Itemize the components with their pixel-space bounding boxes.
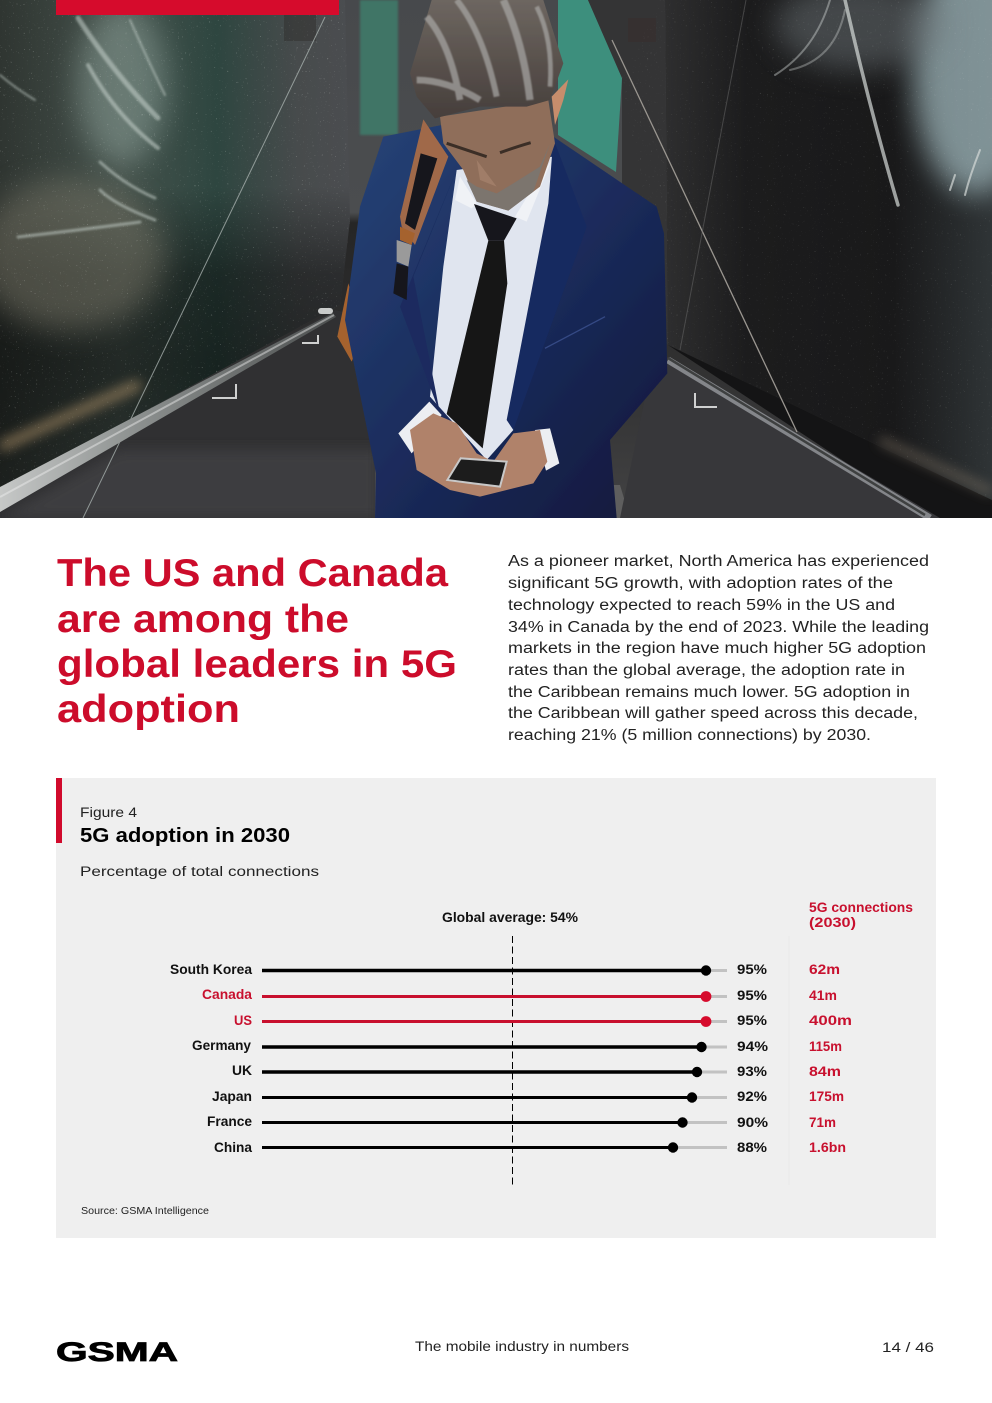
red tab bbox=[56, 0, 339, 15]
hero photo: man in suit looking at phone on stairway bbox=[0, 0, 992, 518]
intro text block: 34% in Canada by the end of 2023. While the leading bbox=[508, 619, 929, 636]
row: France: 71m bbox=[809, 1115, 836, 1130]
row: Japan: Japan bbox=[212, 1089, 252, 1104]
row: South Korea: 95% bbox=[737, 962, 767, 977]
intro text block: significant 5G growth, with adoption rates of the bbox=[508, 575, 893, 592]
intro text block: rates than the global average, the adoption rate in bbox=[508, 662, 905, 679]
row: Canada: 41m bbox=[809, 988, 837, 1003]
figure subtitle: Percentage of total connections bbox=[80, 864, 319, 879]
footer title: The mobile industry in numbers bbox=[415, 1339, 629, 1354]
row: Japan: 92% bbox=[737, 1089, 767, 1104]
row: UK bbox=[232, 1063, 841, 1079]
row: Japan: 175m bbox=[809, 1089, 844, 1104]
intro text block: the Caribbean will gather speed across this decade, bbox=[508, 705, 918, 722]
row: France: France bbox=[207, 1114, 252, 1129]
main heading: adoption bbox=[57, 688, 240, 731]
main heading bbox=[57, 552, 457, 731]
row: France bbox=[207, 1114, 836, 1130]
footer logo: GSMA: GSMA bbox=[56, 1337, 178, 1367]
row: US: 400m bbox=[809, 1013, 852, 1028]
source note: Source: GSMA Intelligence bbox=[81, 1205, 209, 1217]
row: Germany bbox=[192, 1038, 842, 1054]
intro text block: markets in the region have much higher 5G adoption bbox=[508, 640, 926, 657]
row: France: 90% bbox=[737, 1115, 768, 1130]
main heading: The US and Canada bbox=[57, 552, 448, 595]
row: US: 95% bbox=[737, 1013, 767, 1028]
man bbox=[337, 0, 667, 518]
row: South Korea bbox=[170, 962, 840, 977]
row: South Korea: South Korea bbox=[170, 962, 252, 977]
row: Japan bbox=[212, 1089, 844, 1104]
row: Germany: 94% bbox=[737, 1039, 768, 1054]
row: Germany: Germany bbox=[192, 1038, 251, 1053]
row: China bbox=[214, 1140, 846, 1155]
row: UK: 93% bbox=[737, 1064, 767, 1079]
row: China: China bbox=[214, 1140, 252, 1155]
panel: figure 4 bbox=[56, 778, 936, 1238]
row: US bbox=[234, 1013, 852, 1028]
row: China: 1.6bn bbox=[809, 1140, 846, 1155]
row: UK: 84m bbox=[809, 1064, 841, 1079]
intro text block: As a pioneer market, North America has experienced bbox=[508, 553, 929, 570]
row: South Korea: 62m bbox=[809, 962, 840, 977]
figure title: 5G adoption in 2030 bbox=[80, 824, 290, 847]
row: UK: UK bbox=[232, 1063, 252, 1078]
page number: 14 / 46 bbox=[882, 1340, 934, 1355]
row: US: US bbox=[234, 1013, 252, 1028]
red accent bar bbox=[56, 778, 62, 843]
intro text block: technology expected to reach 59% in the US and bbox=[508, 597, 895, 614]
chart: 5G adoption lollipops bbox=[170, 900, 913, 1186]
column header: 5G connections: (2030) bbox=[809, 915, 856, 930]
column header: 5G connections: 5G connections bbox=[809, 900, 913, 915]
row: China: 88% bbox=[737, 1140, 767, 1155]
intro text block: the Caribbean remains much lower. 5G adoption in bbox=[508, 684, 910, 701]
row: Canada: Canada bbox=[202, 987, 252, 1002]
row: Canada bbox=[202, 987, 837, 1003]
row: Canada: 95% bbox=[737, 988, 767, 1003]
intro text block: reaching 21% (5 million connections) by 2030. bbox=[508, 727, 871, 744]
main heading: global leaders in 5G bbox=[57, 643, 457, 686]
row: Germany: 115m bbox=[809, 1039, 842, 1054]
figure label: Figure 4 bbox=[80, 805, 138, 820]
main heading: are among the bbox=[57, 598, 349, 641]
intro text block bbox=[508, 553, 929, 744]
column header: 5G connections bbox=[809, 900, 913, 930]
global average marker: Global average: 54% bbox=[442, 910, 578, 925]
